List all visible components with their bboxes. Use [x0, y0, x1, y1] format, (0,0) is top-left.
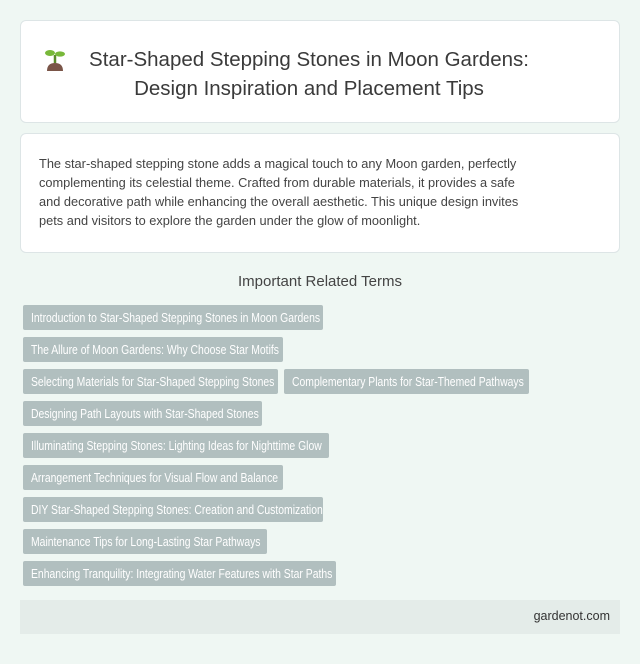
icon: seedling — [45, 50, 65, 71]
tag list: Designing Path Layouts with Star-Shaped Stones — [31, 406, 259, 421]
tag list: Complementary Plants for Star-Themed Pathways — [292, 374, 524, 389]
footer: gardenot.com — [534, 609, 610, 623]
tag list: Illuminating Stepping Stones: Lighting Ideas for Nighttime Glow — [31, 438, 322, 453]
tag list: Arrangement Techniques for Visual Flow and Balance — [31, 470, 278, 485]
tag list: Maintenance Tips for Long-Lasting Star Pathways — [31, 534, 261, 549]
intro text card: The star-shaped stepping stone adds a magical touch to any Moon garden, perfectly complementing its celestial theme. Crafted from durable materials, it provides a safe and decorative path while enhancing the overall aesthetic. This unique design invites pets and visitors to explore the garden under the glow of moonlight. — [39, 156, 518, 228]
tag list: DIY Star-Shaped Stepping Stones: Creation and Customization — [31, 502, 323, 517]
tag list: The Allure of Moon Gardens: Why Choose Star Motifs — [31, 342, 279, 357]
title: Star-Shaped Stepping Stones in Moon Gardens: Design Inspiration and Placement Tips — [89, 48, 529, 100]
tag list: Selecting Materials for Star-Shaped Stepping Stones — [31, 374, 274, 389]
heading: related terms: Important Related Terms — [238, 273, 402, 290]
tag list: Enhancing Tranquility: Integrating Water Features with Star Paths — [31, 566, 332, 581]
tag list: Introduction to Star-Shaped Stepping Stones in Moon Gardens — [31, 310, 320, 325]
footer — [20, 600, 620, 634]
intro text card — [20, 133, 620, 253]
header card — [20, 20, 620, 123]
tag list — [23, 305, 529, 586]
